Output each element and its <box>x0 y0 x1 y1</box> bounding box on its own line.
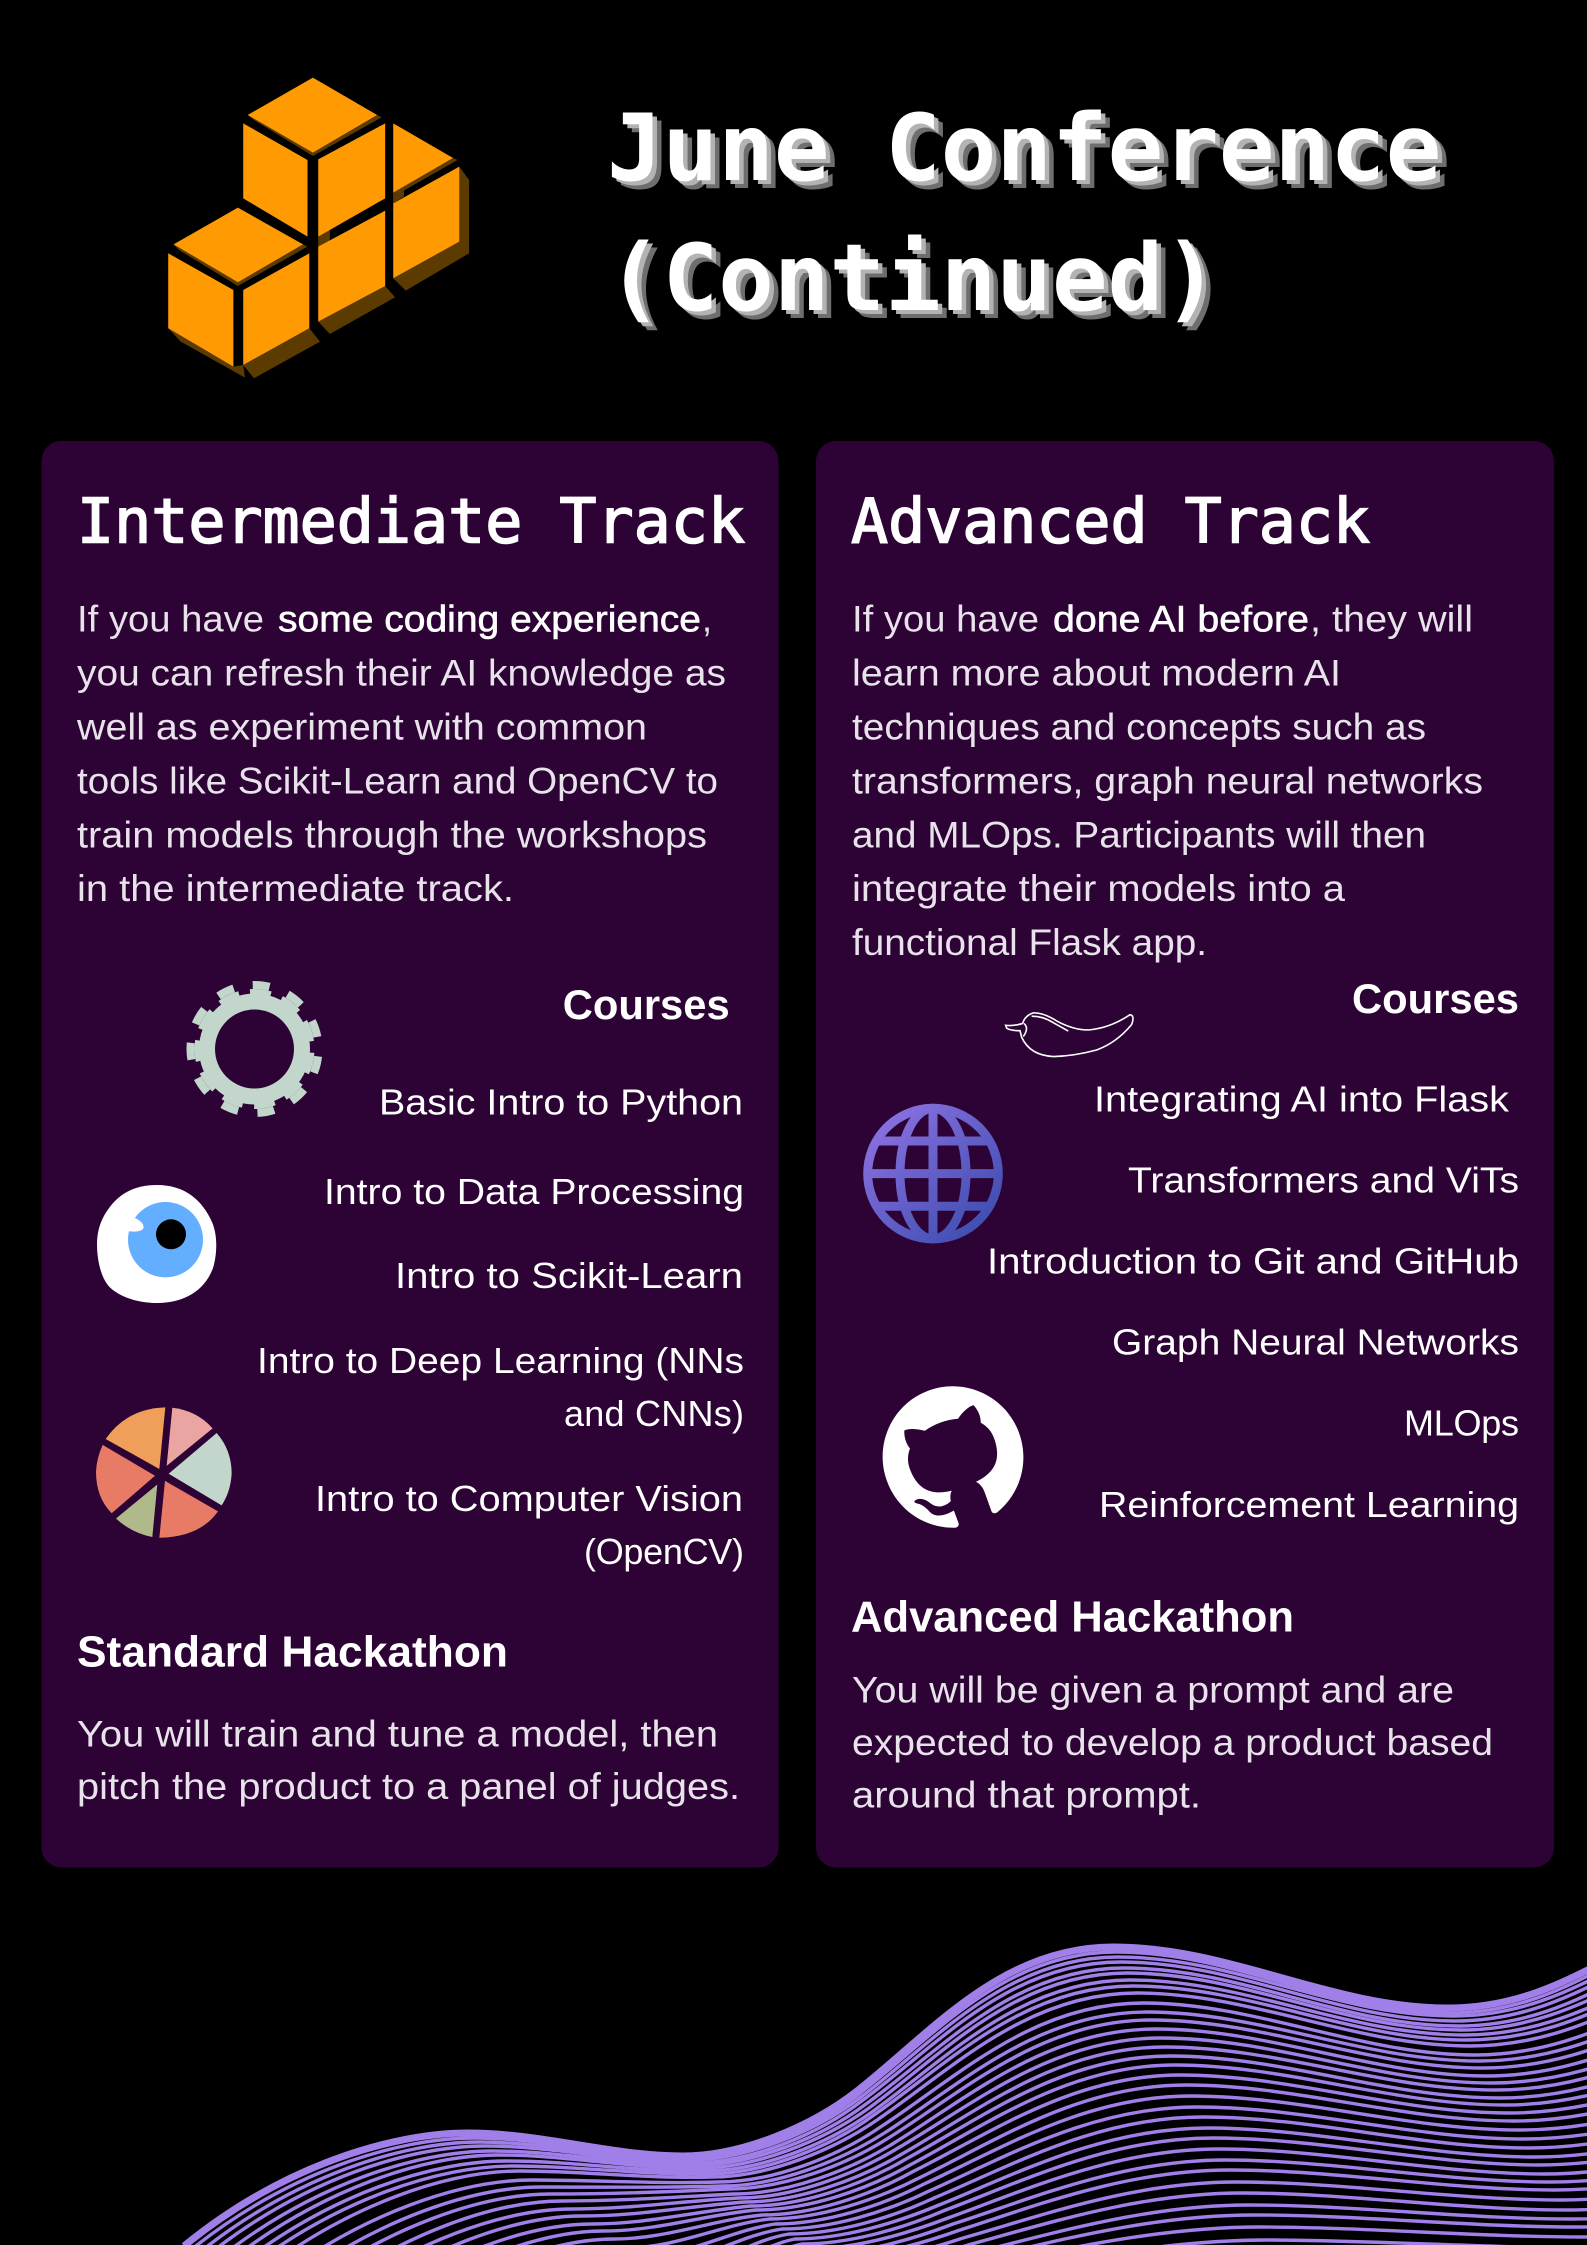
list: intermediate courses: Intro to Computer Vision <box>315 1478 743 1519</box>
text block: advanced description: learn more about modern AI <box>852 653 1341 694</box>
text block: advanced hackathon description: around that prompt. <box>852 1775 1201 1816</box>
text block: advanced description: done AI before <box>1053 599 1309 640</box>
heading: courses: Courses <box>563 981 730 1028</box>
text block: intermediate description: tools like Scikit-Learn and OpenCV to <box>77 760 718 801</box>
heading: courses: Courses <box>1352 975 1519 1022</box>
text block: advanced description: , they will <box>1310 599 1473 640</box>
heading: advanced track: Advanced Track <box>851 486 1370 558</box>
list: intermediate courses: Intro to Data Processing <box>324 1171 744 1212</box>
icon: chili pepper <box>1006 1013 1133 1057</box>
text block: advanced hackathon description: expected to develop a product based <box>852 1722 1493 1763</box>
heading: intermediate track: Intermediate Track <box>77 486 745 558</box>
icon: orange isometric cubes <box>168 78 469 378</box>
icon: eye <box>97 1185 216 1303</box>
list: advanced courses <box>987 1079 1519 1525</box>
text block: advanced description: and MLOps. Participants will then <box>852 814 1426 855</box>
text block: intermediate description: If you have <box>77 599 264 640</box>
text block: intermediate description: you can refresh their AI knowledge as <box>77 653 726 694</box>
list: advanced courses: Introduction to Git and GitHub <box>987 1241 1519 1282</box>
list: intermediate courses <box>257 1081 744 1572</box>
text block: advanced hackathon description <box>852 1670 1493 1816</box>
decorative purple wave lines <box>184 1947 1587 2245</box>
list: advanced courses: Reinforcement Learning <box>1099 1484 1519 1525</box>
text block: intermediate description: , <box>702 599 712 640</box>
icon: pie chart <box>96 1407 232 1538</box>
text block: advanced hackathon description: You will be given a prompt and are <box>852 1670 1454 1711</box>
text block: intermediate description: train models through the workshops <box>77 814 707 855</box>
text block: advanced description: If you have <box>852 599 1039 640</box>
text block: intermediate description: some coding experience <box>278 599 701 640</box>
list: intermediate courses: (OpenCV) <box>584 1531 744 1572</box>
text block: standard hackathon description: You will train and tune a model, then <box>77 1714 718 1755</box>
list: intermediate courses: and CNNs) <box>564 1393 744 1434</box>
list: intermediate courses: Intro to Deep Learning (NNs <box>257 1340 744 1381</box>
title: (Continued) <box>607 224 1219 332</box>
list: intermediate courses: Intro to Scikit-Learn <box>395 1255 743 1296</box>
text block: standard hackathon description <box>77 1714 740 1807</box>
text block: intermediate description: well as experiment with common <box>76 707 647 748</box>
heading: standard hackathon: Standard Hackathon <box>77 1628 508 1677</box>
text block: intermediate description <box>76 599 726 909</box>
text block: advanced description: integrate their models into a <box>852 868 1345 909</box>
text block: advanced description: functional Flask app. <box>852 922 1207 963</box>
text block: standard hackathon description: pitch the product to a panel of judges. <box>77 1766 740 1807</box>
title <box>607 94 1447 332</box>
list: advanced courses: Graph Neural Networks <box>1112 1322 1519 1363</box>
list: advanced courses: Transformers and ViTs <box>1128 1159 1519 1200</box>
panel: advanced track <box>816 441 1554 1868</box>
text block: intermediate description: in the intermediate track. <box>77 868 514 909</box>
list: advanced courses: Integrating AI into Flask <box>1094 1079 1510 1120</box>
icon: gear <box>189 983 320 1115</box>
title: June Conference <box>607 94 1441 202</box>
text block: advanced description: techniques and concepts such as <box>852 707 1426 748</box>
text block: advanced description: transformers, graph neural networks <box>852 760 1483 801</box>
panel: intermediate track <box>42 441 778 1868</box>
icon: globe <box>868 1108 998 1239</box>
list: intermediate courses: Basic Intro to Python <box>379 1081 743 1122</box>
heading: advanced hackathon: Advanced Hackathon <box>851 1593 1294 1642</box>
icon: github mark <box>863 1366 1042 1544</box>
list: advanced courses: MLOps <box>1404 1402 1519 1443</box>
text block: advanced description <box>852 599 1483 963</box>
